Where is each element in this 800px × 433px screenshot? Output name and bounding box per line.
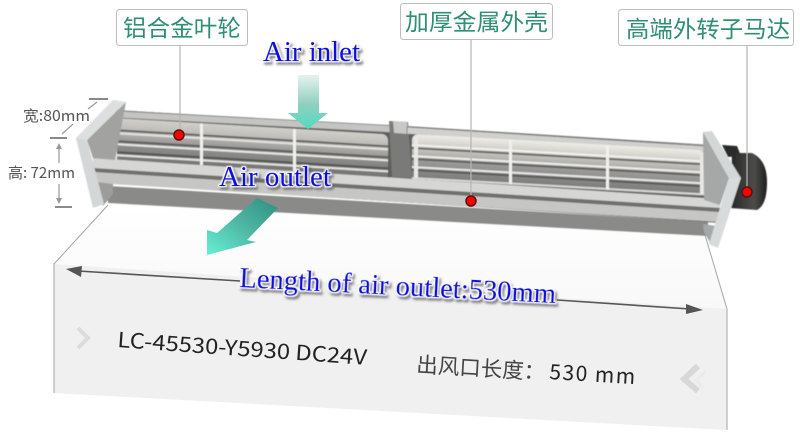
air outlet label: Air outlet bbox=[219, 162, 331, 193]
lower bottom plate bbox=[108, 186, 708, 236]
left end plate bbox=[76, 100, 126, 208]
centre bearing bracket bbox=[389, 121, 412, 178]
impeller: left drum bbox=[113, 118, 388, 180]
callout: thick metal shell: 加厚金属外壳 bbox=[405, 3, 548, 37]
top rail bbox=[120, 111, 705, 152]
length arrow right bbox=[557, 300, 703, 314]
dimension: height 72mm: 高: 72mm bbox=[8, 162, 75, 183]
dimension: width 80mm bbox=[23, 99, 108, 138]
dimension: height 72mm bbox=[8, 143, 75, 207]
callout: thick metal shell bbox=[400, 3, 552, 206]
air outlet arrow bbox=[207, 198, 278, 255]
air inlet label: Air inlet bbox=[263, 37, 360, 68]
chevrons right bbox=[684, 366, 705, 391]
air inlet arrow bbox=[288, 75, 328, 129]
callout: aluminium impeller bbox=[116, 9, 248, 140]
motor bbox=[722, 145, 767, 210]
callout: external rotor motor bbox=[618, 10, 794, 197]
outlet length value: 530 mm bbox=[549, 356, 636, 391]
frame backing bbox=[115, 110, 705, 200]
dimension: width 80mm: 宽:80mm bbox=[23, 105, 90, 126]
outlet length spec: 出风口长度： bbox=[416, 348, 546, 387]
rails bbox=[93, 158, 720, 223]
length arrow left bbox=[66, 266, 240, 281]
length of air outlet label: Length of air outlet:530mm bbox=[239, 263, 557, 310]
cross-flow fan body bbox=[76, 100, 767, 248]
callout: external rotor motor: 高端外转子马达 bbox=[626, 10, 790, 44]
white product panel bbox=[54, 205, 727, 430]
model number: LC-45530-Y5930 DC24V bbox=[116, 324, 369, 372]
top rail right bbox=[407, 127, 705, 153]
right end plate bbox=[703, 131, 741, 248]
callout: aluminium impeller: 铝合金叶轮 bbox=[123, 9, 241, 43]
chevrons left bbox=[68, 328, 88, 348]
impeller: right drum bbox=[412, 134, 704, 196]
